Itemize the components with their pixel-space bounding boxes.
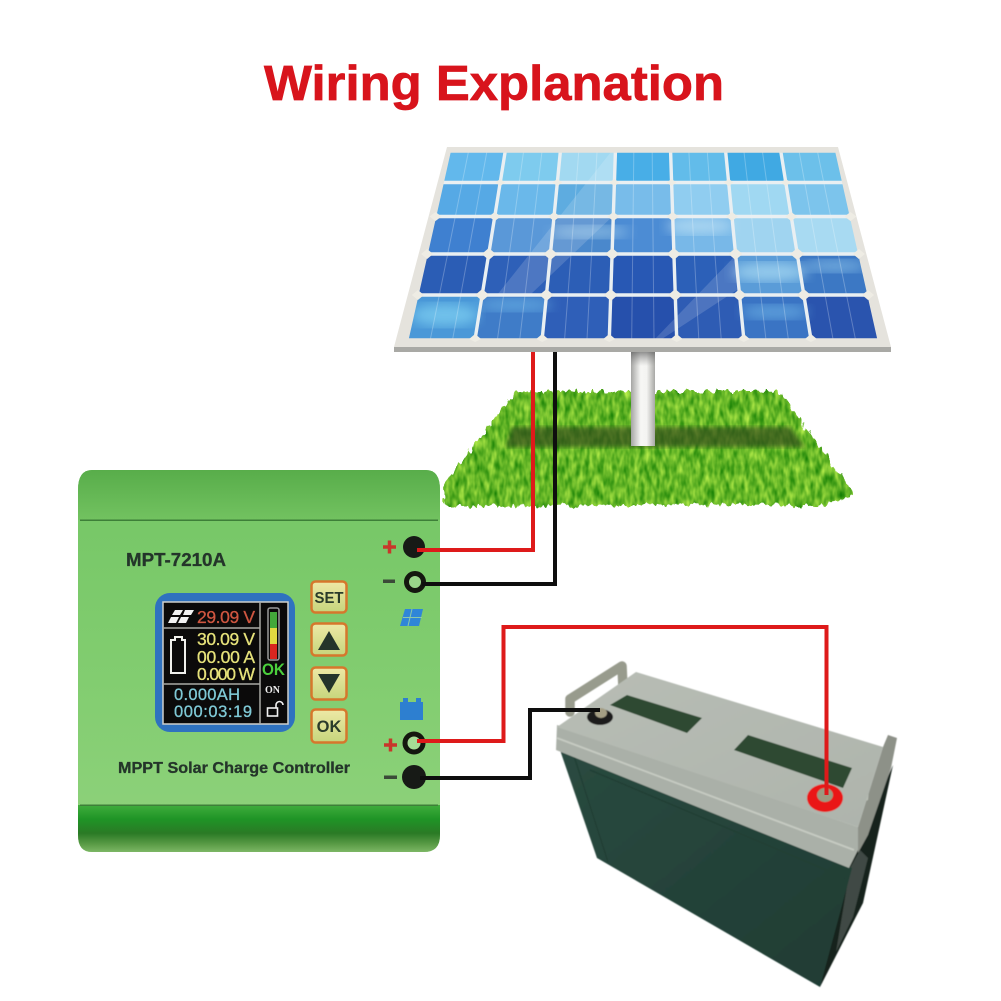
OK button: OK — [317, 718, 341, 736]
positive post — [807, 784, 843, 812]
panel frame — [394, 147, 891, 347]
red battery wire — [417, 627, 826, 795]
icon: blue battery — [400, 698, 423, 720]
SET button — [312, 582, 346, 612]
dark side face — [820, 765, 893, 987]
lid rim — [556, 725, 858, 868]
cell grid lines — [418, 152, 868, 339]
solar negative terminal — [383, 574, 424, 590]
battery readings — [197, 629, 255, 684]
capacity and time readings: 0.000AH — [174, 686, 240, 704]
left handle — [570, 666, 623, 712]
up button — [312, 624, 346, 656]
bottom band — [78, 805, 440, 852]
top band — [78, 470, 440, 520]
pole shadow on grass — [506, 427, 805, 447]
battery wires — [417, 627, 826, 795]
unlock icon — [268, 702, 283, 716]
solar panel support pole — [631, 350, 655, 446]
solar panel — [394, 147, 891, 352]
capacity and time readings — [174, 686, 252, 721]
lid label right — [734, 735, 852, 788]
solar cells — [408, 152, 878, 339]
SET button: SET — [314, 590, 344, 607]
controller unit — [78, 470, 440, 852]
solar wires — [417, 352, 555, 584]
black battery wire — [420, 710, 600, 778]
ON status: ON — [265, 685, 280, 696]
battery positive terminal — [384, 734, 423, 752]
grid junction diamonds — [412, 179, 874, 342]
battery negative terminal — [384, 765, 426, 789]
LCD screen — [155, 593, 295, 732]
down button — [312, 668, 346, 700]
front face moulding — [574, 756, 845, 878]
capacity and time readings: 000:03:19 — [174, 703, 252, 721]
battery icon — [171, 637, 185, 673]
OK status: OK — [262, 661, 285, 679]
controller body — [78, 470, 440, 852]
icon: blue solar panel — [400, 609, 423, 626]
lid label left — [610, 695, 702, 733]
solar icon — [168, 610, 194, 623]
front face — [560, 750, 852, 987]
sky reflections — [411, 152, 867, 339]
solar positive terminal — [383, 536, 425, 558]
black solar wire — [422, 352, 555, 584]
negative post — [587, 708, 613, 725]
charge level bar — [268, 608, 279, 660]
lid top — [557, 672, 883, 827]
battery readings: 0.000 W — [197, 664, 255, 684]
OK button — [312, 710, 346, 742]
model label: MPT-7210A — [126, 550, 226, 570]
grass lawn — [443, 391, 855, 506]
cell outer edge — [408, 152, 878, 339]
right handle highlight — [855, 757, 872, 806]
red solar wire — [417, 352, 533, 550]
title: Wiring Explanation — [264, 57, 724, 111]
lower side flange — [836, 850, 868, 952]
product label: MPPT Solar Charge Controller — [118, 760, 350, 777]
right handle — [858, 735, 897, 853]
solar voltage: 29.09 V — [197, 607, 255, 627]
battery — [556, 666, 897, 987]
battery readings: 00.00 A — [197, 647, 255, 667]
lid rim groove — [557, 738, 854, 850]
battery readings: 30.09 V — [197, 629, 255, 649]
